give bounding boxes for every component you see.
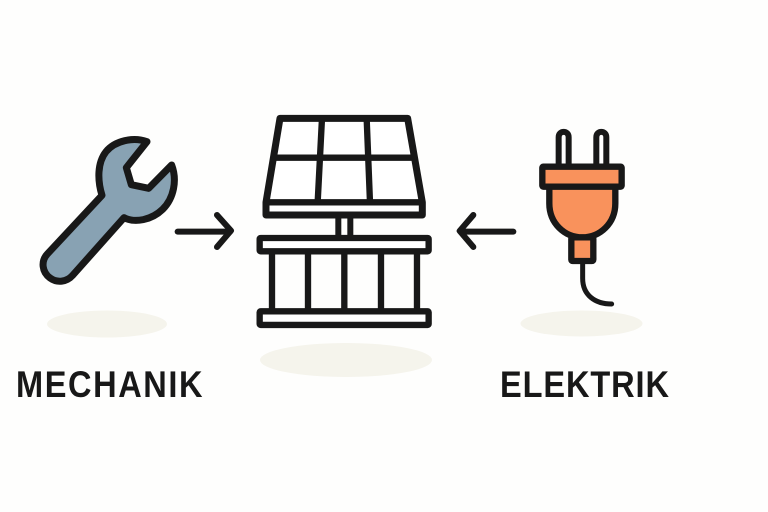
neck — [571, 237, 593, 261]
cord — [583, 263, 612, 304]
panel post — [338, 217, 350, 237]
shadow: wrench — [47, 310, 167, 338]
panel grid lines — [266, 118, 422, 202]
lower rail — [260, 311, 429, 325]
body — [549, 186, 615, 237]
shadow: solar panel — [260, 343, 432, 377]
icon: wrench — [43, 140, 174, 281]
collar — [542, 167, 622, 187]
upper rail — [260, 238, 429, 251]
icon: solar panel — [260, 118, 429, 325]
arrow: plug to panel — [460, 215, 513, 247]
label: ELEKTRIK: ELEKTRIK — [500, 364, 669, 405]
prongs — [559, 132, 606, 167]
panel frame — [266, 118, 422, 215]
vertical bars — [272, 251, 417, 311]
arrow: wrench to panel — [178, 215, 231, 247]
icon: plug — [542, 132, 622, 304]
shadow: plug — [520, 310, 642, 336]
label: MECHANIK: MECHANIK — [16, 364, 203, 405]
